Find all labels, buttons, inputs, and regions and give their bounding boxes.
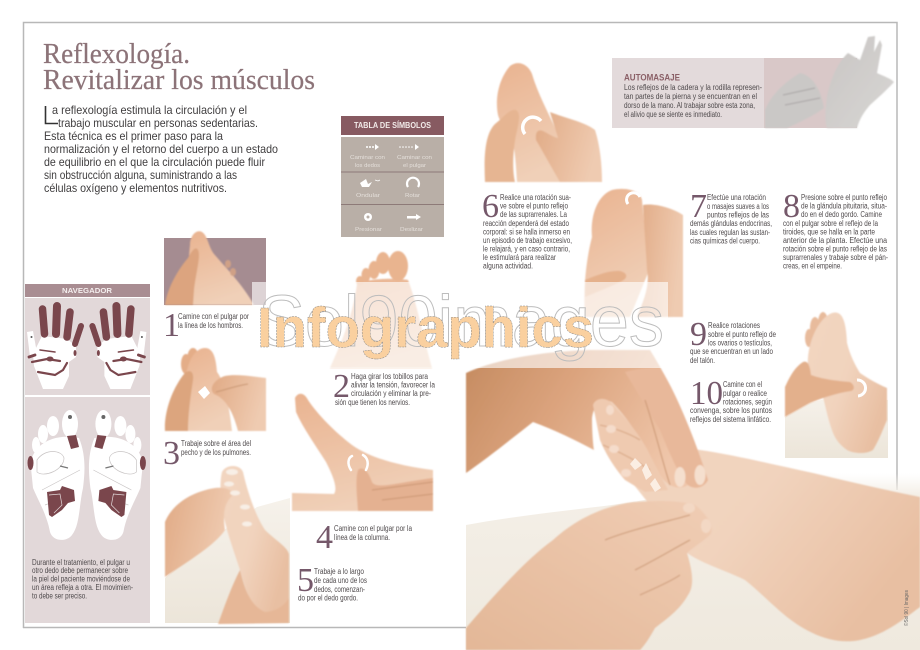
panel: automasaje: AUTOMASAJE [624, 72, 680, 82]
step 3 text [163, 435, 251, 472]
panel: tabla de símbolos: Ondular [356, 193, 380, 199]
watermark: Infographics [257, 296, 594, 360]
step 5 text: de cada uno de los [314, 576, 367, 585]
step 1 text: Camine con el pulgar por [178, 312, 249, 321]
photo: step 7 [584, 189, 683, 317]
step 2 text: 2 [333, 368, 350, 405]
step 2 text: circulación y eliminar la pre- [351, 389, 431, 398]
step 4 text: 4 [316, 519, 333, 556]
step 2 text: Haga girar los tobillos para [351, 372, 429, 381]
step 5 text: dedos, comenzan- [314, 585, 365, 594]
step 8 text: con el pulgar sobre el reflejo de la [783, 219, 879, 228]
step 8 text: suprarrenales y trabaje sobre el pán- [783, 253, 888, 262]
photo: large foot massage [466, 350, 920, 650]
icon: reflex map of hands [27, 306, 146, 389]
towel [466, 473, 920, 650]
step 8 text: 8 [783, 188, 800, 225]
title: Revitalizar los músculos [43, 65, 315, 96]
step 1 text [163, 307, 249, 344]
step 8 text: tiroides, que se halla en la parte [783, 228, 875, 236]
step 10 text: convenga, sobre los puntos [690, 406, 772, 415]
credit: ©Sol 90 | Images [903, 590, 910, 626]
step 6 text [482, 188, 572, 270]
photo: step 3 [165, 348, 266, 431]
step 9 text: del talón. [690, 356, 715, 365]
step 9 text [690, 316, 776, 365]
navigator note text: la piel del paciente moviéndose de [32, 574, 130, 584]
step 2 text: sión que tienen los nervios. [335, 398, 410, 407]
step 10 text: rotaciones, según [723, 398, 772, 406]
panel: navegador: NAVEGADOR [62, 286, 113, 295]
step 5 text: Trabaje a lo largo [314, 567, 365, 576]
intro text block: trabajo muscular en personas sedentarias. [58, 117, 258, 130]
panel: tabla de símbolos: Rotar [405, 193, 420, 199]
panel: tabla de símbolos: TABLA DE SÍMBOLOS [354, 121, 431, 130]
photo: step 2 [330, 251, 432, 368]
step 8 text: de la glándula pituitaria, situa- [801, 202, 887, 210]
step 8 text: anterior de la planta. Efectúe una [783, 236, 888, 245]
panel: automasaje [612, 36, 894, 128]
step 5 text [297, 562, 367, 602]
step 4 text: línea de la columna. [334, 533, 390, 542]
title: Reflexología. [43, 39, 190, 70]
step 6 text: 6 [482, 188, 499, 225]
step 3 text: 3 [163, 435, 180, 472]
panel: tabla de símbolos: Deslizar [400, 227, 423, 233]
step 4 text [316, 519, 413, 556]
step 5 text: do por el dedo gordo. [298, 594, 358, 602]
photo: hands [765, 36, 894, 128]
intro text block [44, 104, 278, 195]
foot [593, 398, 920, 641]
step 9 text: 9 [690, 316, 707, 353]
step 7 text: cias químicas del cuerpo. [690, 236, 760, 246]
step 6 text: ve sobre el punto reflejo [500, 202, 569, 210]
panel: tabla de símbolos: el pulgar [403, 163, 426, 169]
navigator note text: Durante el tratamiento, el pulgar u [32, 558, 130, 567]
step 8 text: creas, en el empeine. [783, 262, 842, 270]
panel: navegador [25, 284, 150, 623]
watermark: Sol90images [258, 282, 664, 362]
panel: tabla de símbolos: Presionar [355, 227, 382, 233]
upper arm and hand [466, 350, 708, 488]
intro text block: Esta técnica es el primer paso para la [44, 130, 223, 143]
photo: step 6 [485, 63, 602, 182]
fingers [625, 368, 708, 488]
step 8 text: do en el dedo gordo. Camine [801, 210, 882, 219]
step 9 text: Realice rotaciones [708, 321, 760, 330]
panel: tabla de símbolos: los dedos [355, 163, 380, 169]
title [43, 39, 315, 96]
step 10 text: Camine con el [723, 380, 762, 389]
panel: automasaje: tan partes de la pierna y se encuentran en el [624, 92, 757, 101]
step 1 text: la línea de los hombros. [178, 321, 243, 330]
step 6 text: de las suprarrenales. La [500, 210, 568, 219]
navigator note text: un área refleja a otra. El movimien- [32, 583, 133, 592]
step 8 text [783, 188, 888, 270]
step 7 text: puntos reflejos de las [707, 210, 769, 220]
step 6 text: corporal: si se halla inmerso en [483, 228, 570, 236]
step 10 text: pulgar o realice [723, 389, 767, 398]
panel: automasaje: dorso de la mano. Al trabajar sobre esta zona, [624, 101, 755, 110]
panel: tabla de símbolos: Caminar con [350, 155, 385, 161]
step 3 text: pecho y de los pulmones. [181, 448, 251, 457]
step 7 text [690, 188, 772, 246]
step 9 text: sobre el punto reflejo de [708, 330, 776, 339]
step 9 text: los ovarios o testículos, [708, 338, 772, 348]
step 10 text: reflejos del sistema linfático. [690, 415, 771, 424]
photo: step 4 [292, 394, 433, 511]
step 6 text: alguna actividad. [483, 262, 533, 270]
intro text block: de equilibrio en el que la circulación puede fluir [44, 156, 265, 169]
intro text block: normalización y el retorno del cuerpo a un estado [44, 143, 278, 156]
step 8 text: Presione sobre el punto reflejo [801, 193, 888, 202]
panel: automasaje: el alivio que se siente es inmediato. [624, 110, 722, 119]
step 2 text [333, 368, 436, 407]
panel: tabla de símbolos [341, 116, 444, 237]
step 6 text: reacción dependerá del estado [483, 219, 570, 228]
step 10 text [690, 375, 772, 424]
toes [593, 399, 668, 492]
icon: reflex map of feet [28, 410, 146, 540]
step 1 text: 1 [163, 307, 180, 344]
photo: step 1 [164, 231, 266, 305]
step 6 text: le relajará, y en caso contrario, [483, 244, 570, 254]
lower hand [466, 501, 712, 650]
intro text block: a reflexología estimula la circulación y el [52, 104, 247, 117]
step 9 text: que se encuentran en un lado [690, 347, 774, 356]
step 7 text: Efectúe una rotación [707, 193, 766, 202]
panel: automasaje: Los reflejos de la cadera y la rodilla represen- [624, 83, 762, 92]
step 6 text: Realice una rotación sua- [500, 193, 571, 202]
step 5 text: 5 [297, 562, 314, 599]
navigator note text: to debe ser preciso. [32, 592, 87, 600]
step 10 text: 10 [690, 375, 723, 412]
step 7 text: demás glándulas endocrinas, [690, 219, 772, 228]
intro text block: sin obstrucción alguna, suministrando a las [44, 169, 237, 182]
photo: step 10 [785, 312, 888, 458]
step 8 text: rotación sobre el punto reflejo de las [783, 244, 887, 254]
panel: tabla de símbolos: Caminar con [397, 155, 432, 161]
intro text block: células oxígeno y elementos nutritivos. [44, 182, 227, 195]
step 3 text: Trabaje sobre el área del [181, 439, 251, 448]
photo: step 5 [165, 466, 290, 624]
step 4 text: Camine con el pulgar por la [334, 524, 413, 533]
navigator note text: otro dedo debe permanecer sobre [32, 566, 128, 575]
step 6 text: un episodio de trabajo excesivo, [483, 236, 572, 245]
step 7 text: 7 [690, 188, 707, 225]
navigator note text [32, 558, 133, 600]
step 2 text: aliviar la tensión, favorecer la [351, 380, 436, 390]
step 6 text: le estimulará para realizar [483, 253, 556, 262]
step 7 text: las cuales regulan las sustan- [690, 228, 770, 237]
step 7 text: o masajes suaves a los [707, 202, 769, 211]
